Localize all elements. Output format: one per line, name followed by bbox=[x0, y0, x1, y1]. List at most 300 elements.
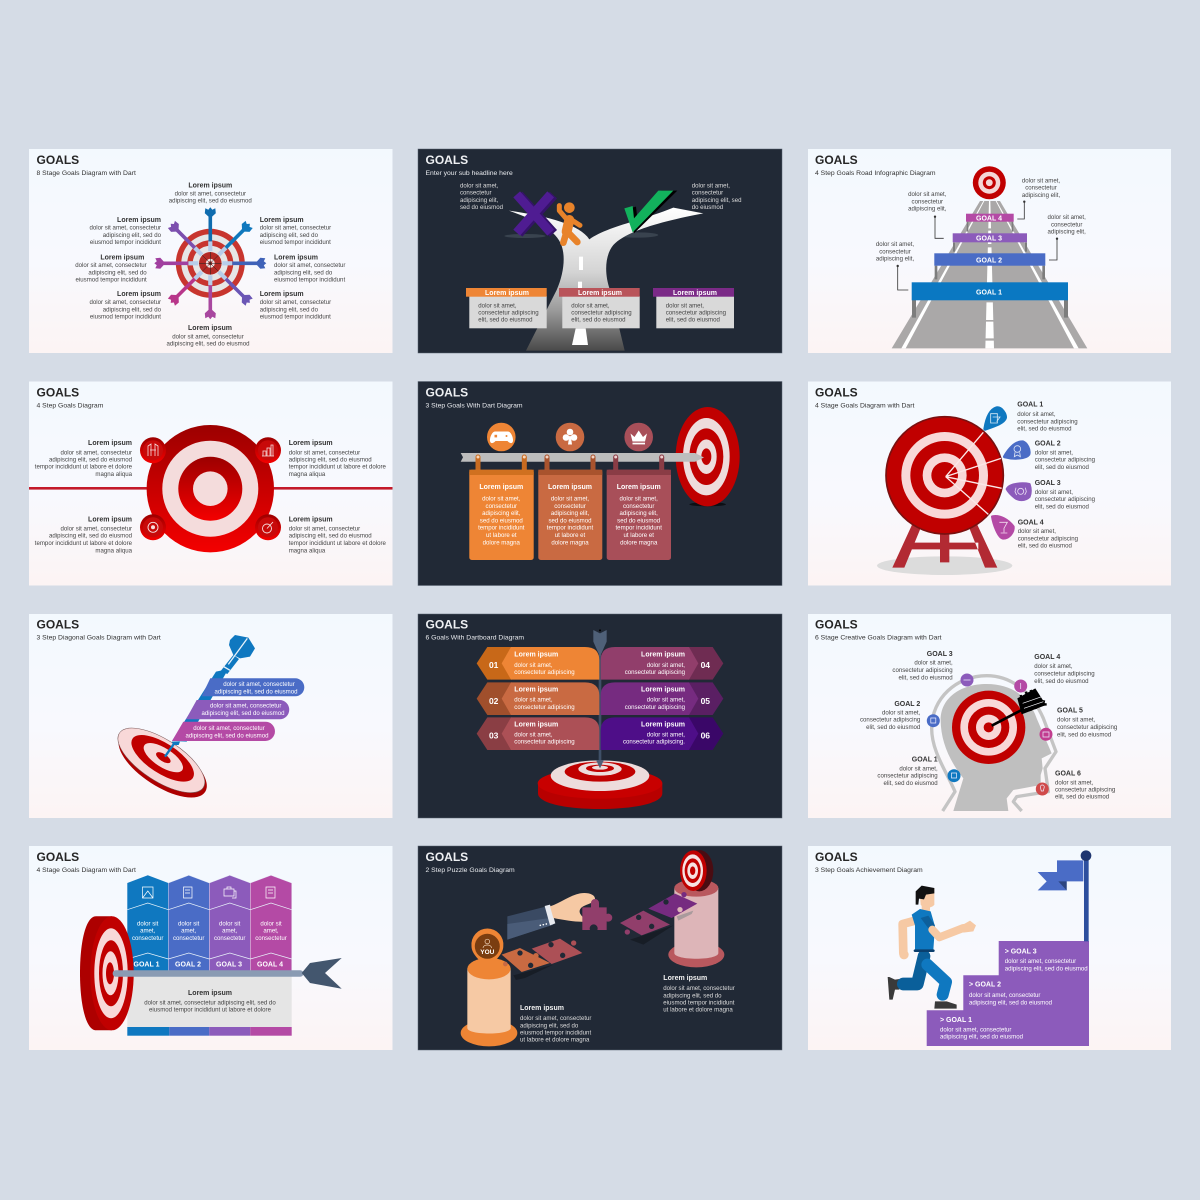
title: GOALS bbox=[815, 618, 858, 632]
title: GOALS bbox=[815, 850, 858, 864]
hanging card: rose: Lorem ipsum bbox=[617, 484, 661, 491]
text block: left: dolor sit amet, consectetur bbox=[75, 262, 147, 269]
goal 3 board: GOAL 3 bbox=[976, 235, 1002, 242]
hanging card: copper: dolor sit amet, bbox=[551, 496, 589, 503]
text: left option: dolor sit amet, bbox=[460, 182, 499, 189]
text block: lower left: adipiscing elit, sed do bbox=[103, 306, 162, 313]
text block: bottom: Lorem ipsum bbox=[188, 325, 232, 332]
text: goal 4 note: consectetur bbox=[1025, 185, 1057, 192]
purple stairs bbox=[927, 941, 1089, 1046]
text block: goal 3: dolor sit amet, bbox=[1035, 489, 1073, 496]
title: GOALS bbox=[426, 386, 468, 400]
text: item 04: dolor sit amet, bbox=[647, 662, 685, 669]
hanging card: copper: ut labore et bbox=[555, 532, 586, 539]
text: item 06: 06 bbox=[701, 730, 710, 740]
text block: lower right bbox=[289, 516, 387, 554]
you pin marker: YOU bbox=[480, 949, 495, 956]
step pill 1: adipiscing elit, sed do eiusmod bbox=[214, 688, 298, 695]
text block: lower right: adipiscing elit, sed do eiusmod bbox=[289, 533, 372, 540]
text block: goal 1 step: adipiscing elit, sed do eiusmod bbox=[940, 1034, 1023, 1041]
hanging card: rose: dolor sit amet, bbox=[620, 496, 658, 503]
text: goal 1 note: dolor sit amet, bbox=[876, 241, 914, 248]
text: item 01: consectetur adipiscing bbox=[514, 669, 575, 676]
text block: goal 1: GOAL 1 bbox=[1017, 402, 1043, 409]
column: goal 3: consectetur bbox=[214, 935, 245, 942]
card: orange: consectetur adipiscing bbox=[478, 310, 539, 317]
column: goal 1: amet, bbox=[140, 928, 156, 935]
text block: bottom: adipiscing elit, sed do eiusmod bbox=[166, 341, 250, 348]
hanging card: orange: tempor incididunt bbox=[478, 525, 525, 532]
text block: goal 1 step bbox=[940, 1017, 1023, 1041]
hand holding puzzle piece bbox=[507, 893, 612, 940]
text block: goal 4: dolor sit amet, bbox=[1018, 528, 1056, 535]
text block: goal 2: GOAL 2 bbox=[1035, 441, 1061, 448]
text block: goal 2 bbox=[1035, 441, 1095, 471]
text block: goal 2: dolor sit amet, bbox=[1035, 449, 1073, 456]
hanging card: orange: dolore magna bbox=[483, 539, 521, 546]
text block: lower right: eiusmod tempor incididunt bbox=[260, 313, 331, 320]
text: goal 4 note: dolor sit amet, bbox=[1022, 177, 1060, 184]
icon: target bbox=[973, 166, 1006, 199]
text block: goal 3 step: dolor sit amet, consectetur bbox=[1005, 958, 1076, 965]
text block: goal 3 step bbox=[1005, 949, 1088, 972]
title: GOALS bbox=[815, 386, 858, 400]
item 02 bbox=[477, 682, 599, 715]
text block: goal 3: GOAL 3 bbox=[927, 651, 953, 658]
text block: lower right: tempor incididunt ut labore et dolore bbox=[289, 540, 387, 547]
text block: lower left: dolor sit amet, consectetur bbox=[61, 526, 132, 533]
step pill 3: adipiscing elit, sed do eiusmod bbox=[186, 732, 268, 739]
icon: goal 4 pick bbox=[992, 516, 1013, 538]
subtitle: Enter your sub headline here bbox=[426, 170, 513, 177]
panel: 4 step goals bbox=[29, 382, 392, 586]
panel: 2 step puzzle bbox=[418, 846, 782, 1050]
text block: goal 6: GOAL 6 bbox=[1055, 771, 1081, 778]
gray text box with colour bar: Lorem ipsum bbox=[188, 990, 232, 997]
text block: goal 1 step: dolor sit amet, consectetur bbox=[940, 1026, 1011, 1033]
card: purple: Lorem ipsum bbox=[673, 290, 717, 297]
text block: goal 5 bbox=[1057, 708, 1117, 738]
text block: goal 4: dolor sit amet, bbox=[1034, 663, 1073, 670]
text block: goal 2 step: > GOAL 2 bbox=[969, 981, 1001, 988]
step pill 1 bbox=[202, 678, 304, 696]
hanging card: copper: Lorem ipsum bbox=[548, 484, 592, 491]
arrow bbox=[113, 958, 342, 989]
text block: lower left: magna aliqua bbox=[95, 547, 133, 554]
text block: goal 4 bbox=[1034, 654, 1095, 685]
gray text box with colour bar: dolor sit amet, consectetur adipiscing elit, sed do bbox=[144, 1000, 276, 1007]
text block: goal 3 bbox=[892, 651, 953, 681]
text block: goal: ut labore et dolore magna bbox=[663, 1007, 733, 1014]
text: item 05: dolor sit amet, bbox=[647, 697, 685, 704]
panel: 6 goals with dartboard bbox=[418, 614, 782, 818]
text: goal 1 note: consectetur bbox=[879, 248, 911, 255]
column: goal 1: dolor sit bbox=[137, 920, 159, 927]
hanging card: orange: dolor sit amet, bbox=[482, 496, 521, 503]
title: GOALS bbox=[36, 153, 79, 167]
column: goal 4: GOAL 4 bbox=[257, 962, 283, 968]
text block: upper right: eiusmod tempor incididunt bbox=[260, 239, 331, 246]
text block: goal 3: consectetur adipiscing bbox=[1035, 496, 1095, 503]
text block: goal 1: dolor sit amet, bbox=[1017, 411, 1056, 418]
hanging card: rose: tempor incididunt bbox=[615, 525, 662, 532]
text block: top: adipiscing elit, sed do eiusmod bbox=[169, 198, 252, 205]
text block: goal 2 step bbox=[969, 981, 1052, 1006]
text block: upper right: Lorem ipsum bbox=[289, 440, 333, 447]
text: right option: adipiscing elit, sed bbox=[692, 197, 741, 204]
text: item 04: 04 bbox=[701, 660, 710, 670]
text block: start bbox=[520, 1005, 591, 1044]
card: orange: dolor sit amet, bbox=[478, 302, 517, 309]
text block: goal 5: GOAL 5 bbox=[1057, 708, 1083, 715]
text block: upper left: Lorem ipsum bbox=[88, 440, 132, 447]
panel: 4 stage dart target on stand bbox=[808, 382, 1171, 586]
road bbox=[892, 201, 1087, 348]
text block: goal 3: elit, sed do eiusmod bbox=[1035, 503, 1089, 510]
column: goal 1: GOAL 1 bbox=[134, 962, 160, 968]
text block: upper left: adipiscing elit, sed do eiusmod bbox=[49, 456, 132, 463]
text: item 01 bbox=[489, 652, 575, 676]
hanging card: orange: ut labore et bbox=[486, 532, 517, 539]
text block: left bbox=[75, 254, 147, 283]
text block: upper left: magna aliqua bbox=[95, 471, 133, 478]
text block: goal 2: dolor sit amet, bbox=[882, 710, 921, 717]
panel: 4 step road bbox=[808, 149, 1171, 353]
hanging card: orange: consectetur bbox=[486, 503, 517, 510]
subtitle: 3 Step Diagonal Goals Diagram with Dart bbox=[36, 634, 161, 642]
goal 4 board bbox=[966, 214, 1014, 222]
goal 1 board: GOAL 1 bbox=[976, 289, 1002, 296]
text block: top: Lorem ipsum bbox=[188, 183, 232, 190]
target bbox=[676, 407, 740, 506]
hanging card: rose: consectetur bbox=[623, 503, 654, 510]
text block: lower left: Lorem ipsum bbox=[117, 291, 161, 298]
column: goal 4: dolor sit bbox=[260, 920, 282, 927]
text block: goal 4 bbox=[1018, 519, 1078, 550]
text block: goal 6 bbox=[1055, 771, 1115, 801]
text block: start: ut labore et dolore magna bbox=[520, 1037, 590, 1044]
flag on pole bbox=[1038, 850, 1091, 941]
text block: top bbox=[169, 183, 252, 205]
text block: start: Lorem ipsum bbox=[520, 1005, 564, 1012]
text: item 02: Lorem ipsum bbox=[514, 687, 558, 694]
text block: right: eiusmod tempor incididunt bbox=[274, 276, 345, 283]
subtitle: 6 Goals With Dartboard Diagram bbox=[426, 634, 524, 642]
hanging card: orange bbox=[469, 455, 534, 560]
step pill 2: adipiscing elit, sed do eiusmod bbox=[202, 710, 284, 717]
text block: goal 1: elit, sed do eiusmod bbox=[883, 780, 938, 787]
text block: upper left: Lorem ipsum bbox=[117, 217, 161, 224]
text block: top: dolor sit amet, consectetur bbox=[175, 190, 246, 198]
red horizontal line bbox=[29, 487, 392, 490]
text block: goal 4: GOAL 4 bbox=[1018, 519, 1044, 526]
column: goal 2: consectetur bbox=[173, 935, 204, 942]
text: item 06: consectetur adipiscing. bbox=[623, 739, 685, 746]
text block: upper left: eiusmod tempor incididunt bbox=[90, 239, 161, 246]
icon: lower right badge bbox=[255, 514, 281, 540]
text block: left: Lorem ipsum bbox=[100, 254, 144, 261]
gray text box with colour bar: eiusmod tempor incididunt ut labore et dolore bbox=[149, 1007, 272, 1014]
text block: upper right: tempor incididunt ut labore et dolore bbox=[289, 464, 387, 471]
text block: goal 3 step: adipiscing elit, sed do eiusmod bbox=[1005, 965, 1088, 972]
hanging card: copper: dolore magna bbox=[551, 539, 589, 546]
goal 1 board bbox=[912, 282, 1068, 300]
gray text box with colour bar bbox=[127, 976, 292, 1036]
dart bbox=[165, 635, 255, 757]
icon: gamepad bbox=[487, 423, 516, 451]
connectors bbox=[897, 201, 1058, 290]
card: red: consectetur adipiscing bbox=[571, 310, 632, 317]
text block: goal 3 step: > GOAL 3 bbox=[1005, 949, 1037, 956]
text block: lower left bbox=[35, 516, 133, 554]
text block: goal 3: dolor sit amet, bbox=[914, 659, 953, 666]
column: goal 2: dolor sit bbox=[178, 920, 200, 927]
item 01 bbox=[477, 647, 599, 680]
text block: upper right: adipiscing elit, sed do eiusmod bbox=[289, 456, 372, 463]
icon: goal 3 pick bbox=[1007, 484, 1030, 500]
title: GOALS bbox=[36, 850, 79, 864]
column: goal 4: amet, bbox=[263, 928, 279, 935]
text: left option: adipiscing elit, bbox=[460, 197, 499, 204]
hanging card: rose: ut labore et bbox=[623, 532, 654, 539]
text block: goal 4: elit, sed do eiusmod bbox=[1034, 678, 1089, 685]
icon: orange walking figure bbox=[559, 202, 580, 243]
text: item 05 bbox=[625, 687, 710, 711]
text block: upper left bbox=[35, 440, 133, 478]
text: item 01: dolor sit amet, bbox=[514, 662, 553, 669]
text block: upper right: dolor sit amet, consectetur bbox=[260, 225, 331, 232]
text block: goal 3: consectetur adipiscing bbox=[892, 667, 953, 674]
column: goal 2: amet, bbox=[181, 928, 197, 935]
goal 2 board bbox=[934, 253, 1045, 266]
text block: goal 1 bbox=[1017, 402, 1078, 432]
head silhouette bbox=[932, 676, 1056, 811]
text block: goal 2: elit, sed do eiusmod bbox=[1035, 464, 1089, 471]
text block: upper right bbox=[260, 217, 331, 246]
item 04 bbox=[601, 647, 723, 680]
panel: 4 stage columns with dart bbox=[29, 846, 392, 1050]
tilted dartboard bbox=[108, 716, 217, 810]
you pin marker bbox=[471, 929, 503, 969]
text block: goal 2: consectetur adipiscing bbox=[1035, 457, 1095, 464]
text block: goal 4: consectetur adipiscing bbox=[1018, 535, 1078, 542]
text block: bottom: dolor sit amet, consectetur bbox=[172, 334, 244, 341]
icon: crown bbox=[624, 423, 653, 451]
text block: lower left: tempor incididunt ut labore et dolore bbox=[35, 540, 133, 547]
text block: goal 3: elit, sed do eiusmod bbox=[898, 674, 953, 681]
text block: upper right: dolor sit amet, consectetur bbox=[289, 449, 360, 456]
text block: goal 6: consectetur adipiscing bbox=[1055, 787, 1115, 794]
text block: start: eiusmod tempor incididunt bbox=[520, 1029, 591, 1036]
text block: upper left: adipiscing elit, sed do bbox=[103, 232, 162, 239]
target on stand bbox=[877, 417, 1012, 575]
title: GOALS bbox=[426, 153, 468, 167]
subtitle: 3 Step Goals Achievement Diagram bbox=[815, 867, 923, 874]
icon: upper right badge bbox=[255, 437, 281, 463]
text block: goal 2: consectetur adipiscing bbox=[860, 717, 920, 724]
text block: right bbox=[274, 254, 345, 283]
panel: 3 step achievement bbox=[808, 846, 1171, 1050]
text block: start: adipiscing elit, sed do bbox=[520, 1022, 579, 1029]
text block: right: adipiscing elit, sed do bbox=[274, 269, 333, 276]
text: item 02 bbox=[489, 687, 575, 711]
text: goal 2 note: consectetur bbox=[1051, 221, 1082, 228]
icon: upper left badge bbox=[140, 437, 166, 463]
hanging card: orange: Lorem ipsum bbox=[479, 484, 523, 491]
subtitle: 4 Step Goals Diagram bbox=[36, 402, 104, 410]
panel: 6 stage head diagram bbox=[808, 614, 1171, 818]
text block: goal 1: GOAL 1 bbox=[912, 756, 938, 763]
text: left option: consectetur bbox=[460, 190, 492, 197]
dartboard with eight darts bbox=[154, 207, 266, 319]
text block: lower left bbox=[90, 291, 162, 320]
text block: lower right: dolor sit amet, consectetur bbox=[289, 526, 360, 533]
column: goal 1: consectetur bbox=[132, 935, 163, 942]
forked road bbox=[504, 208, 703, 351]
icon: goal 2 pick bbox=[1005, 442, 1029, 458]
column: goal 1 bbox=[127, 875, 168, 971]
text block: left: adipiscing elit, sed do bbox=[88, 269, 147, 276]
title: GOALS bbox=[426, 618, 468, 632]
text block: goal 3: GOAL 3 bbox=[1035, 480, 1061, 487]
hanging card: rose: dolore magna bbox=[620, 539, 658, 546]
hanging card: copper bbox=[538, 455, 602, 560]
goal 2 board: GOAL 2 bbox=[976, 257, 1002, 264]
card: purple: elit, sed do eiusmod bbox=[666, 317, 720, 324]
text block: goal 4: elit, sed do eiusmod bbox=[1018, 543, 1072, 550]
icon: green tick bbox=[624, 191, 677, 233]
text: item 01: Lorem ipsum bbox=[514, 652, 558, 659]
goal nodes bbox=[927, 674, 1052, 796]
goal 3 board bbox=[953, 233, 1027, 242]
text: goal 2 note: adipiscing elit, bbox=[1048, 229, 1086, 236]
hanging card: copper: tempor incididunt bbox=[547, 525, 594, 532]
icon: goal 1 pick bbox=[985, 408, 1005, 429]
text block: lower right: dolor sit amet, consectetur bbox=[260, 299, 331, 306]
title: GOALS bbox=[426, 850, 468, 864]
text block: goal 1: dolor sit amet, bbox=[899, 765, 938, 772]
step pill 3: dolor sit amet, consectetur bbox=[193, 725, 265, 732]
card: red: elit, sed do eiusmod bbox=[571, 317, 626, 324]
text block: goal 6: elit, sed do eiusmod bbox=[1055, 794, 1109, 801]
card: orange: elit, sed do eiusmod bbox=[478, 317, 533, 324]
icon: purple cross bbox=[517, 194, 553, 233]
column: goal bbox=[668, 879, 724, 967]
text block: goal 5: elit, sed do eiusmod bbox=[1057, 731, 1111, 738]
text block: goal 2: GOAL 2 bbox=[894, 701, 920, 708]
text block: goal 5: dolor sit amet, bbox=[1057, 717, 1096, 724]
title: GOALS bbox=[815, 153, 858, 167]
column: goal 3: amet, bbox=[222, 928, 238, 935]
text block: right: dolor sit amet, consectetur bbox=[274, 262, 345, 269]
text block: lower right: Lorem ipsum bbox=[260, 291, 304, 298]
arrow bar bbox=[461, 453, 704, 462]
text: item 06 bbox=[623, 721, 710, 746]
text: goal 3 note: adipiscing elit, bbox=[908, 206, 947, 213]
text: item 03: dolor sit amet, bbox=[514, 731, 553, 738]
text block: goal 1: elit, sed do eiusmod bbox=[1017, 425, 1072, 432]
item 03 bbox=[477, 717, 599, 750]
subtitle: 8 Stage Goals Diagram with Dart bbox=[36, 170, 136, 177]
text block: upper left: dolor sit amet, consectetur bbox=[90, 225, 161, 232]
hanging card: rose: adipiscing elit, bbox=[620, 510, 658, 517]
hanging card: rose: sed do eiusmod bbox=[617, 517, 660, 524]
target with arrow bbox=[952, 688, 1047, 764]
running man bbox=[888, 886, 976, 1009]
text block: goal: adipiscing elit, sed do bbox=[663, 992, 722, 999]
text: goal 3 note: consectetur bbox=[912, 198, 943, 205]
arrow with dartboard bbox=[538, 629, 662, 809]
column: start bbox=[461, 958, 517, 1046]
text: goal 4 note: adipiscing elit, bbox=[1022, 192, 1060, 199]
text block: upper right: adipiscing elit, sed do bbox=[260, 232, 319, 239]
text block: goal 1 bbox=[877, 756, 938, 787]
text block: goal: eiusmod tempor incididunt bbox=[663, 999, 735, 1006]
column: goal 4 bbox=[250, 875, 292, 971]
icon: club bbox=[556, 423, 584, 451]
card: red: Lorem ipsum bbox=[578, 290, 622, 297]
text block: bottom bbox=[166, 325, 250, 348]
text block: upper left bbox=[90, 217, 162, 246]
title: GOALS bbox=[36, 618, 79, 632]
step pill 2: dolor sit amet, consectetur bbox=[210, 702, 281, 709]
text block: lower right: Lorem ipsum bbox=[289, 516, 333, 523]
text: item 03 bbox=[489, 721, 575, 746]
hanging card: copper: sed do eiusmod bbox=[548, 517, 592, 524]
panel: 3 step diagonal dart bbox=[29, 614, 392, 818]
text block: goal 1 step: > GOAL 1 bbox=[940, 1017, 972, 1024]
card: red: dolor sit amet, bbox=[571, 302, 610, 309]
text: item 04: Lorem ipsum bbox=[641, 652, 685, 659]
column: goal 3: GOAL 3 bbox=[216, 962, 242, 968]
text block: upper right: Lorem ipsum bbox=[260, 217, 304, 224]
text: item 03: consectetur adipiscing bbox=[514, 739, 575, 746]
step pill 1: dolor sit amet, consectetur bbox=[223, 681, 295, 688]
text: item 05: consectetur adipiscing bbox=[625, 704, 685, 711]
subtitle: 4 Stage Goals Diagram with Dart bbox=[815, 402, 914, 410]
text block: right: Lorem ipsum bbox=[274, 254, 318, 261]
panel: forked road choice bbox=[418, 149, 782, 353]
text block: lower left: dolor sit amet, consectetur bbox=[90, 299, 161, 306]
text block: lower right bbox=[260, 291, 331, 320]
column: goal 2: GOAL 2 bbox=[175, 962, 201, 968]
large target bbox=[147, 425, 274, 552]
puzzle pieces bbox=[502, 892, 697, 980]
card: purple bbox=[653, 288, 734, 328]
text block: goal 4: GOAL 4 bbox=[1034, 654, 1060, 661]
text: right option: do eiusmod bbox=[692, 204, 723, 211]
text block: lower left: Lorem ipsum bbox=[88, 516, 132, 523]
icon: lower left badge bbox=[140, 514, 166, 540]
text block: upper left: dolor sit amet, consectetur bbox=[61, 449, 132, 456]
text block: goal 1: consectetur adipiscing bbox=[1017, 418, 1078, 425]
text: right option: consectetur bbox=[692, 190, 723, 197]
hanging card: copper: adipiscing elit, bbox=[551, 510, 589, 517]
text: item 04 bbox=[625, 652, 710, 676]
text: goal 2 note: dolor sit amet, bbox=[1048, 214, 1086, 221]
text block: goal 2 bbox=[860, 701, 921, 731]
item 06 bbox=[601, 717, 723, 750]
card: purple: consectetur adipiscing bbox=[666, 310, 726, 317]
text block: lower left: adipiscing elit, sed do eiusmod bbox=[49, 533, 132, 540]
text block: goal 1: consectetur adipiscing bbox=[877, 773, 938, 780]
text block: goal 2: elit, sed do eiusmod bbox=[866, 724, 920, 731]
text: item 01: 01 bbox=[489, 660, 499, 670]
text block: goal: dolor sit amet, consectetur bbox=[663, 985, 735, 992]
text: right option: dolor sit amet, bbox=[692, 182, 730, 189]
hanging card: orange: sed do eiusmod bbox=[480, 517, 523, 524]
card: red bbox=[559, 288, 640, 328]
